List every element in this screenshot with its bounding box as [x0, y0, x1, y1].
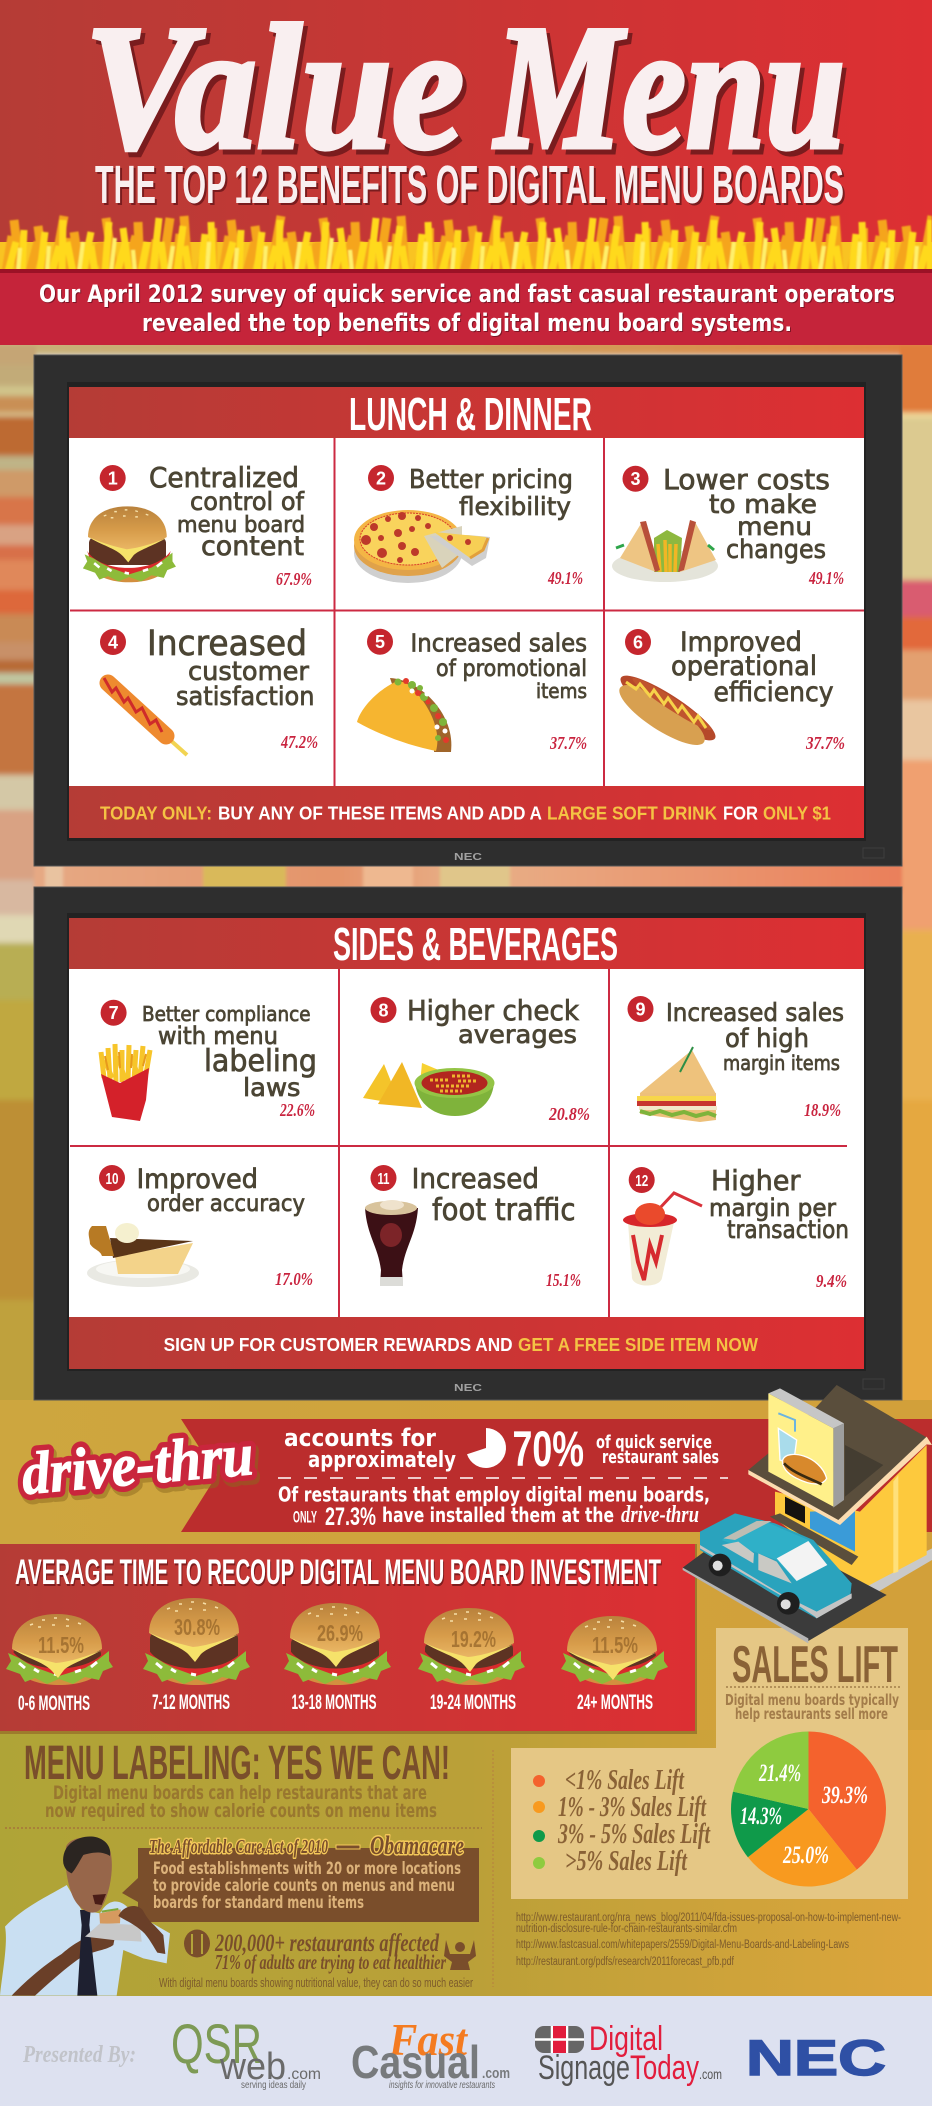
pie chart: 25.0% — [782, 1842, 829, 1869]
page background — [0, 340, 932, 1996]
panel: drive-thru ribbon: Of restaurants that employ digital menu boards, — [278, 1482, 710, 1506]
benefit 1: 67.9% — [276, 569, 312, 589]
icon: nachos and salsa — [363, 1062, 494, 1116]
board footer: ONLY $1 — [763, 804, 831, 824]
panel: drive-thru ribbon: of quick service — [596, 1432, 712, 1453]
benefit 4: 47.2% — [280, 732, 318, 752]
monitor logo: NEC — [454, 852, 482, 863]
panel: menu labeling — [5, 1737, 493, 1990]
panel: drive-thru ribbon: accounts for — [284, 1424, 436, 1452]
panel: sales lift — [511, 1628, 908, 1899]
benefit 2: 2 — [376, 468, 386, 488]
benefit 9: margin items — [723, 1051, 840, 1075]
logo: Digital Signage Today — [535, 2020, 722, 2087]
panel: drive-thru ribbon: drive-thru — [621, 1502, 699, 1528]
logo: NEC: NEC — [746, 2030, 886, 2086]
panel: menu labeling: 200,000+ restaurants affected — [214, 1930, 439, 1957]
icon: glass of cola — [365, 1200, 418, 1286]
panel: drive-thru ribbon: restaurant sales — [602, 1447, 719, 1468]
panel: recoup time — [0, 1544, 697, 1734]
panel: menu labeling: MENU LABELING: YES WE CAN! — [24, 1737, 450, 1790]
benefit 11: foot traffic — [432, 1193, 576, 1228]
panel: drive-thru ribbon: approximately — [308, 1448, 456, 1473]
benefit 1: Centralized — [149, 461, 299, 494]
header background — [0, 0, 932, 272]
monitor logo: NEC — [454, 1383, 482, 1394]
board footer: BUY ANY OF THESE ITEMS AND ADD A — [218, 804, 542, 824]
burger bar: 0-6 months — [6, 1614, 113, 1715]
icon: seventy percent pie — [467, 1428, 506, 1468]
logo: QSR web: serving ideas daily — [241, 2080, 306, 2091]
benefit 7: 7 — [109, 1003, 119, 1023]
benefit 2: Better pricing — [409, 465, 573, 495]
pie chart — [731, 1732, 886, 1886]
board header: SIDES & BEVERAGES — [333, 918, 618, 970]
board footer — [69, 1317, 864, 1369]
benefit 8: Higher check — [407, 994, 580, 1027]
benefit 3: 49.1% — [808, 568, 844, 588]
panel: sponsors footer: Presented By: — [22, 2042, 136, 2068]
benefit 4: Increased — [147, 624, 307, 664]
monitor frame — [34, 355, 902, 866]
benefit 12: 12 — [635, 1173, 648, 1190]
logo: Digital Signage Today: .com — [699, 2066, 722, 2082]
icon: taco — [357, 678, 451, 752]
panel: sides and beverages monitor — [34, 887, 902, 1400]
icon: slice of pie — [87, 1223, 199, 1287]
sources: nutrition-disclosure-rule-for-chain-restaurants-similar.cfm — [516, 1923, 737, 1935]
benefit 11: 15.1% — [546, 1270, 581, 1290]
benefit 8 — [363, 994, 590, 1124]
benefit 10 — [87, 1164, 313, 1289]
board header: LUNCH & DINNER — [349, 388, 592, 440]
benefit 3: changes — [726, 535, 826, 565]
benefit 12: margin per — [709, 1194, 836, 1222]
benefit 4 — [100, 624, 318, 755]
benefit 7 — [101, 1000, 317, 1121]
benefit 12: Higher — [711, 1164, 801, 1197]
benefit 12: 9.4% — [816, 1271, 847, 1291]
board header — [69, 387, 864, 440]
benefit 1 — [83, 461, 312, 589]
pie chart: 14.3% — [740, 1803, 782, 1830]
screen — [69, 918, 864, 1369]
legend: 3% - 5% Sales Lift — [557, 1819, 711, 1850]
burger bar: 19-24 months: 19-24 MONTHS — [430, 1691, 516, 1714]
burger bar: 19-24 months — [418, 1608, 525, 1714]
benefit 5 — [357, 629, 587, 753]
logo: Fast Casual: .com — [482, 2065, 510, 2082]
benefit 5: items — [536, 679, 587, 703]
callout — [122, 1831, 479, 1922]
heading — [15, 1553, 662, 1594]
burger bar: 24+ months — [561, 1616, 668, 1714]
heading: drive-thru: drive-thru — [19, 1421, 256, 1507]
icon: plate with cutlery — [184, 1930, 210, 1958]
icon: fries box — [101, 1044, 150, 1121]
icon: milkshake — [623, 1193, 702, 1286]
panel: menu labeling: With digital menu boards showing nutritional value, they can do so much easier — [159, 1975, 473, 1990]
heading: drive-thru: drive-thru — [19, 1421, 256, 1507]
benefit 8: 20.8% — [548, 1104, 590, 1124]
benefit 9 — [628, 996, 844, 1122]
benefit 12 — [623, 1164, 849, 1291]
logo: QSR web: web — [219, 2046, 286, 2088]
burger bar: 7-12 months: 30.8% — [174, 1614, 220, 1640]
benefit 11 — [365, 1162, 581, 1290]
icon: hot dog — [612, 667, 722, 755]
burger bar: 0-6 months: 0-6 MONTHS — [18, 1692, 90, 1715]
intro band — [0, 269, 932, 345]
benefit 3: menu — [737, 512, 812, 541]
benefit 10: 10 — [106, 1171, 119, 1188]
panel: drive-thru ribbon — [19, 1419, 932, 1532]
benefit 3 — [612, 463, 844, 588]
board footer: TODAY ONLY: — [100, 804, 212, 824]
screen — [69, 387, 864, 838]
benefit 8: averages — [458, 1020, 577, 1049]
benefit 10: 17.0% — [275, 1269, 313, 1289]
panel: menu labeling: 71% of adults are trying to eat healthier — [215, 1950, 447, 1974]
logo: Digital Signage Today: Signage — [538, 2049, 630, 2087]
benefit 6: operational — [671, 651, 817, 682]
fries border — [0, 212, 932, 270]
benefit 11: Increased — [412, 1162, 539, 1195]
benefit 6: efficiency — [714, 677, 834, 708]
burger bar: 0-6 months: 11.5% — [38, 1632, 84, 1658]
benefit 2: 49.1% — [547, 568, 583, 588]
benefit 9: of high — [725, 1024, 809, 1054]
benefit 7: 22.6% — [279, 1100, 315, 1120]
burger bar: 7-12 months: 7-12 MONTHS — [152, 1691, 230, 1714]
benefit 10: Improved — [137, 1164, 258, 1195]
title — [85, 0, 849, 191]
benefit 6: Improved — [680, 627, 802, 658]
panel: drive-thru ribbon: have installed them at the — [382, 1503, 614, 1527]
benefit 9: Increased sales — [666, 998, 844, 1027]
logo: Digital Signage Today: Today — [630, 2049, 699, 2087]
benefit 7: Better compliance — [142, 1002, 311, 1026]
monitor frame — [34, 887, 902, 1400]
callout: Obamacare — [370, 1831, 464, 1860]
burger bar: 13-18 months: 13-18 MONTHS — [292, 1691, 376, 1714]
legend: 1% - 3% Sales Lift — [558, 1792, 707, 1823]
legend: >5% Sales Lift — [565, 1846, 688, 1877]
icon: sandwich wedge — [637, 1047, 717, 1122]
legend — [533, 1765, 711, 1877]
pie chart: 21.4% — [758, 1760, 801, 1787]
logo: QSR web — [171, 2012, 321, 2091]
callout: The Affordable Care Act of 2010 — [149, 1836, 328, 1858]
icon: club sandwich plate — [612, 520, 718, 582]
intro band: revealed the top benefits of digital menu board systems. — [143, 310, 793, 338]
benefit 12: transaction — [727, 1215, 849, 1244]
burger bar: 13-18 months — [284, 1603, 391, 1714]
board footer: LARGE SOFT DRINK — [547, 804, 717, 824]
photo: man eating burrito — [0, 1836, 170, 1996]
burger bar: 24+ months: 11.5% — [592, 1632, 638, 1658]
callout: to provide calorie counts on menus and menu — [153, 1876, 455, 1896]
benefit 7: with menu — [158, 1022, 278, 1050]
benefit 6: 37.7% — [805, 733, 845, 753]
benefit 3: to make — [709, 490, 817, 520]
panel: drive-thru ribbon: 27.3% — [325, 1503, 376, 1531]
callout: boards for standard menu items — [153, 1893, 364, 1913]
callout: Food establishments with 20 or more locations — [153, 1859, 461, 1879]
icon: burger — [83, 506, 176, 582]
logo: Digital Signage Today: Digital — [589, 2020, 663, 2058]
board header — [69, 918, 864, 970]
benefit 4: customer — [188, 657, 309, 687]
benefit 7: laws — [243, 1073, 300, 1102]
benefit 5: of promotional — [436, 656, 587, 682]
sources — [516, 1912, 901, 1968]
logo: Fast Casual: Casual — [351, 2036, 480, 2088]
intro band: revealed the top benefits of digital menu board systems. — [142, 309, 792, 337]
burger bar: 7-12 months — [143, 1598, 250, 1714]
benefit 2: flexibility — [459, 492, 571, 521]
logo: Fast Casual: Fast — [388, 2014, 468, 2065]
benefit 1: menu board — [177, 513, 305, 538]
benefit 6: 6 — [633, 632, 643, 652]
panel: sponsors footer — [0, 1996, 932, 2106]
benefit 7: labeling — [204, 1044, 317, 1079]
illustration: drive-thru restaurant — [683, 1385, 932, 1643]
benefit 9: 18.9% — [804, 1100, 841, 1120]
benefit 2 — [354, 465, 583, 588]
benefit 5: 37.7% — [549, 733, 587, 753]
logo: QSR web: QSR — [171, 2012, 262, 2075]
sources: http://restaurant.org/pdfs/research/2011forecast_pfb.pdf — [516, 1956, 735, 1968]
benefit 1: control of — [190, 487, 305, 516]
benefit 3: Lower costs — [663, 463, 830, 496]
benefit 6 — [612, 627, 845, 755]
board footer — [69, 786, 864, 838]
benefit 4: satisfaction — [176, 682, 314, 712]
logo: QSR web: .com — [287, 2066, 321, 2083]
benefit 1: 1 — [108, 468, 118, 488]
legend: <1% Sales Lift — [565, 1765, 685, 1796]
panel: menu labeling: now required to show calorie counts on menu items — [45, 1800, 437, 1822]
benefit 11: 11 — [378, 1171, 390, 1188]
logo: Fast Casual — [351, 2014, 510, 2091]
heading: drive-thru: drive-thru — [21, 1425, 258, 1511]
logo: Fast Casual: insights for innovative restaurants — [389, 2080, 495, 2091]
burger bar: 24+ months: 24+ MONTHS — [577, 1691, 653, 1714]
icon: pizza — [354, 510, 490, 583]
benefit 10: order accuracy — [147, 1191, 305, 1217]
pie chart: 39.3% — [821, 1782, 868, 1809]
icon: person with cutlery — [444, 1940, 476, 1970]
benefit 1: content — [201, 531, 304, 562]
burger bar: 19-24 months: 19.2% — [451, 1626, 496, 1652]
panel: drive-thru ribbon: ONLY — [293, 1508, 317, 1526]
benefit 5: Increased sales — [410, 629, 587, 658]
benefit 8: 8 — [378, 1000, 389, 1020]
board footer: GET A FREE SIDE ITEM NOW — [518, 1335, 758, 1355]
panel: menu labeling: Digital menu boards can help restaurants that are — [53, 1782, 427, 1804]
burger bar: 13-18 months: 26.9% — [317, 1620, 363, 1646]
board footer: FOR — [723, 804, 758, 824]
benefit 4: 4 — [108, 632, 118, 652]
icon: corn dog — [104, 678, 187, 755]
panel: drive-thru ribbon: 70% — [512, 1421, 584, 1477]
benefit 9: 9 — [635, 1000, 646, 1020]
board footer: SIGN UP FOR CUSTOMER REWARDS AND — [164, 1335, 513, 1355]
benefit 5: 5 — [375, 632, 385, 652]
benefit 3: 3 — [630, 469, 641, 489]
panel: lunch and dinner monitor — [34, 355, 902, 866]
